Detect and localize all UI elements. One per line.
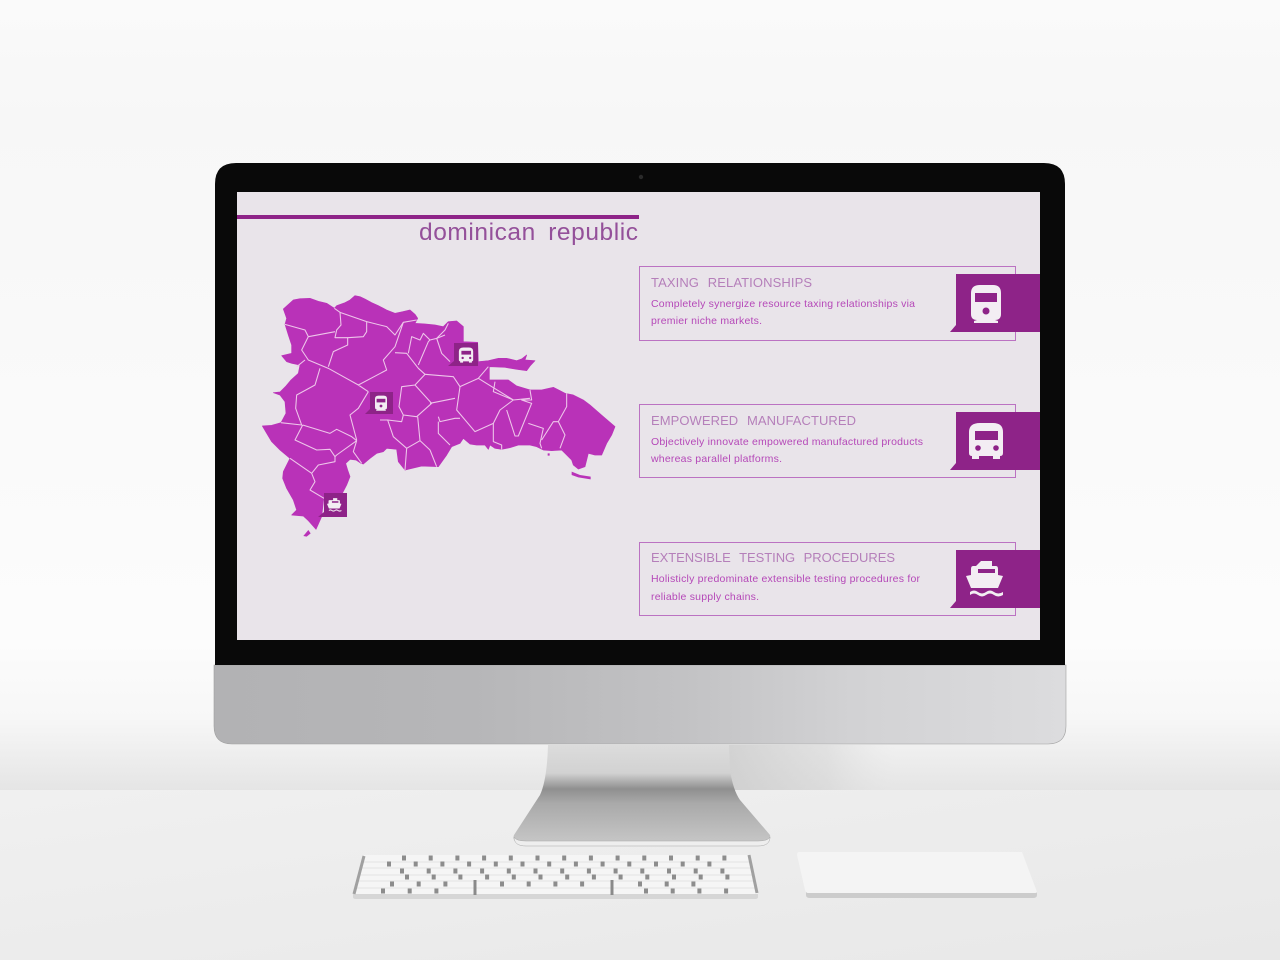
card frame: [640, 266, 1016, 340]
icon banner: [950, 550, 1040, 608]
icon: bus: [969, 423, 1003, 459]
card body: reliable supply chains.: [651, 591, 759, 603]
card heading: EXTENSIBLE TESTING PROCEDURES: [651, 550, 895, 565]
camera: [639, 175, 643, 179]
card heading: EMPOWERED MANUFACTURED: [651, 413, 856, 428]
province borders: [281, 308, 567, 498]
card body: Objectively innovate empowered manufactured products: [651, 436, 923, 448]
icon: train: [971, 285, 1001, 323]
card: extensible testing procedures: [640, 542, 1040, 616]
card frame: [640, 542, 1016, 616]
map marker: ship: [318, 493, 347, 517]
title: dominican republic: [419, 219, 638, 246]
card body: whereas parallel platforms.: [650, 453, 782, 465]
card body: Completely synergize resource taxing relationships via: [651, 298, 915, 310]
trackpad: [797, 852, 1037, 898]
monitor shadow on wall: [725, 745, 895, 790]
map marker: bus: [448, 343, 478, 366]
icon banner: [950, 412, 1040, 470]
card frame: [640, 404, 1016, 478]
monitor chin: [214, 665, 1066, 744]
icon: ship: [966, 561, 1003, 596]
card body: premier niche markets.: [651, 315, 762, 327]
map of dominican republic: [262, 296, 615, 537]
monitor bezel: [215, 163, 1065, 665]
card body: Holisticly predominate extensible testing procedures for: [651, 573, 920, 585]
map landmass: [262, 296, 615, 529]
map marker: train: [365, 392, 393, 414]
icon banner: [950, 274, 1040, 332]
monitor stand: [513, 745, 770, 846]
keyboard: [353, 855, 758, 899]
islands: [303, 453, 591, 537]
card: taxing relationships: [640, 266, 1040, 340]
title rule: [237, 215, 639, 219]
desk: [0, 790, 1280, 960]
screen slide: [237, 192, 1040, 640]
card: empowered manufactured: [640, 404, 1040, 478]
card heading: TAXING RELATIONSHIPS: [651, 275, 812, 290]
